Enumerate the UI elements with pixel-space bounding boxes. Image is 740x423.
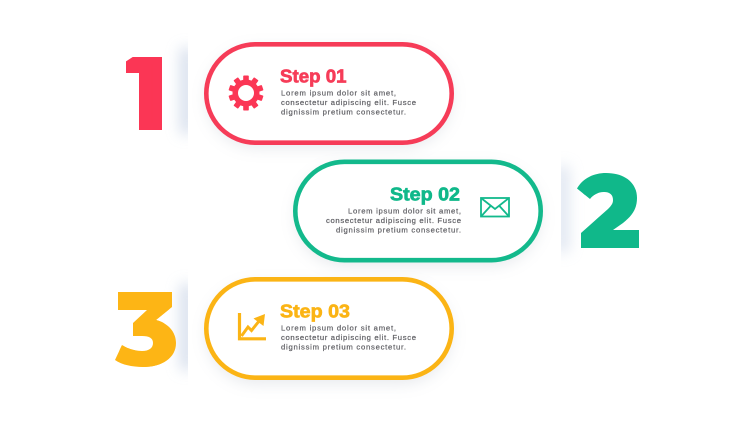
panel: step 2 [295, 162, 541, 265]
text block: step 3: consectetur adipiscing elit. Fusce [281, 333, 416, 342]
text block: step 2: Lorem ipsum dolor sit amet, [348, 206, 461, 216]
heading: step 02: Step 02 [390, 184, 460, 204]
icon: gear [228, 76, 264, 110]
panel edge shadow: step 1 [180, 48, 194, 134]
text block: step 2: dignissim pretium consectetur. [336, 226, 461, 234]
number 1: 1 [120, 35, 179, 153]
text block: step 1: Lorem ipsum dolor sit amet, [281, 88, 396, 98]
text block: step 3 [281, 324, 416, 352]
text block: step 2 [326, 206, 461, 234]
icon: envelope [481, 198, 509, 216]
heading: step 03: Step 03 [280, 300, 350, 322]
number 2: 2 [579, 153, 637, 271]
text block: step 2: consectetur adipiscing elit. Fusce [326, 216, 461, 225]
panel edge shadow: step 3 [180, 284, 194, 370]
text block: step 1: dignissim pretium consectetur. [281, 108, 406, 116]
pill outline: step 3 [206, 279, 452, 378]
pill outline: step 2 [295, 162, 541, 260]
text block: step 1: consectetur adipiscing elit. Fusce [281, 98, 416, 107]
text block: step 3: dignissim pretium consectetur. [281, 342, 406, 352]
pill outline: step 1 [206, 44, 452, 143]
text block: step 1 [281, 88, 416, 116]
text block: step 3: Lorem ipsum dolor sit amet, [281, 324, 396, 332]
panel: step 3 [206, 279, 452, 383]
icon: growth chart [240, 313, 266, 339]
panel edge shadow: step 2 [555, 166, 569, 252]
heading: step 01: Step 01 [280, 66, 346, 86]
number 3: 3 [116, 271, 175, 389]
panel: step 1 [206, 44, 452, 147]
